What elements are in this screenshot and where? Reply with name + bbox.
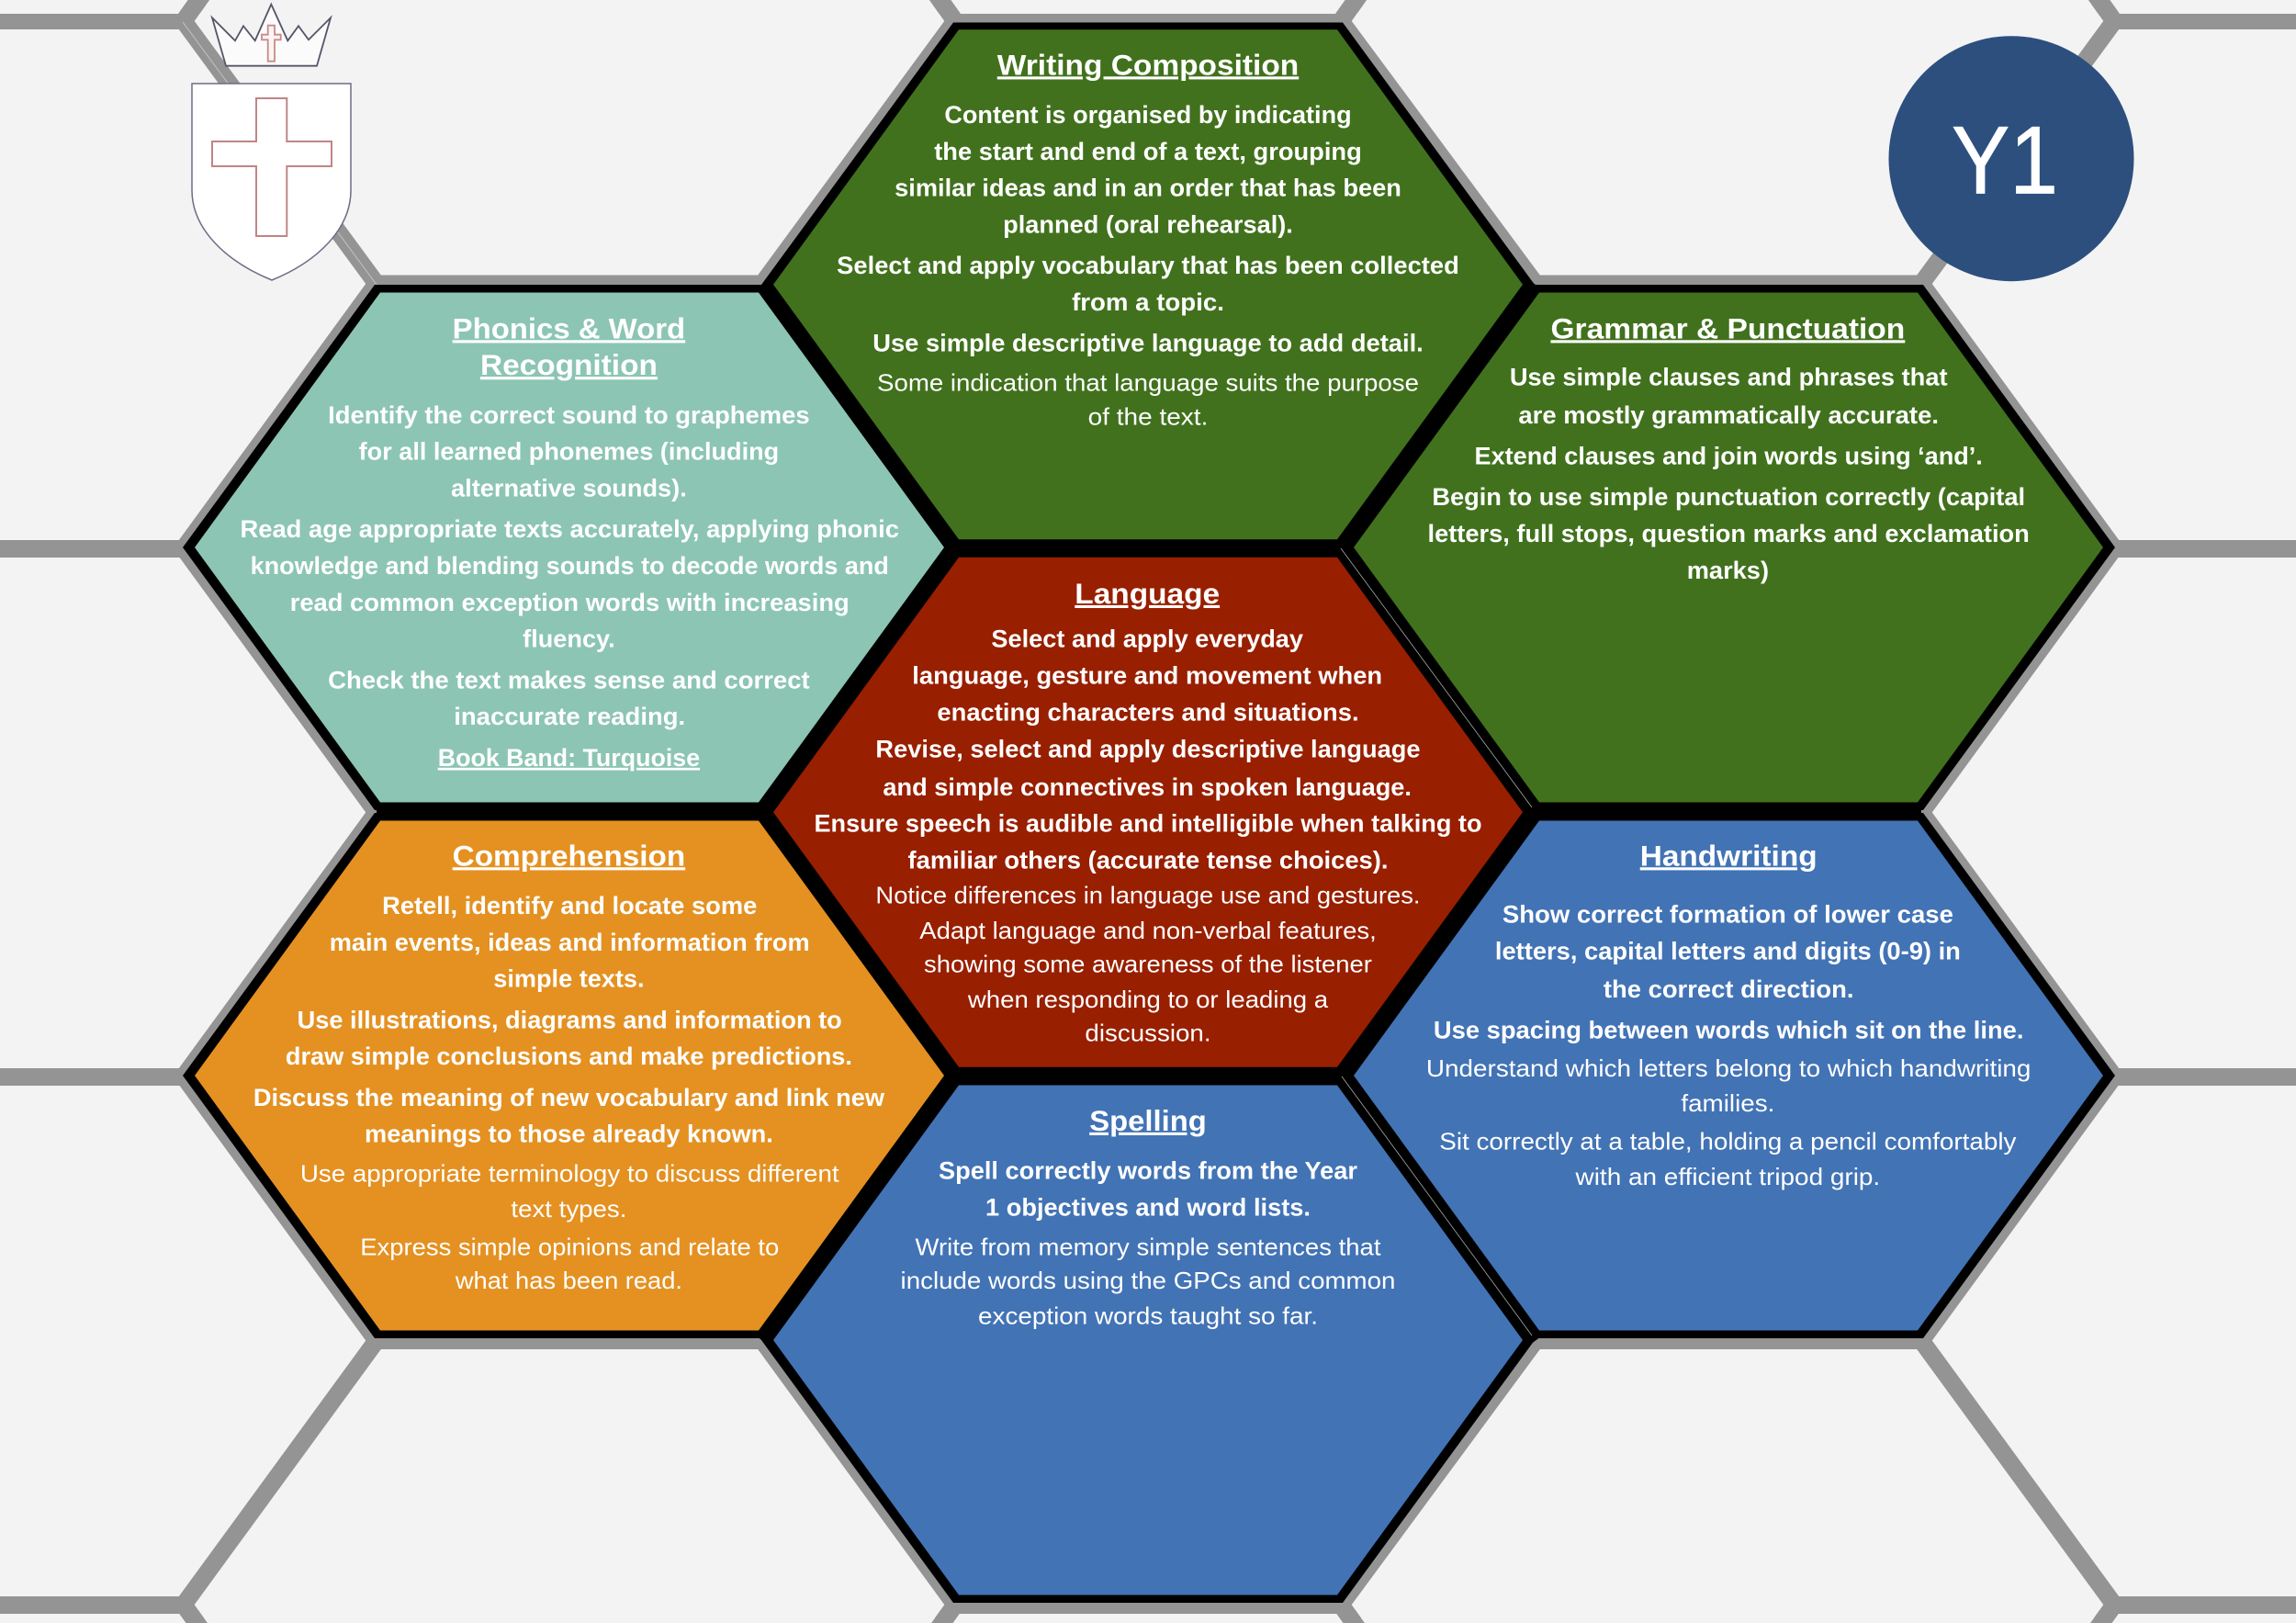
text: Phonics and Word Recognition: knowledge and blending sounds to decode words and <box>251 552 889 580</box>
text: Comprehension: what has been read. <box>455 1268 682 1294</box>
text: Grammar and Punctuation: Begin to use simple punctuation correctly (capital <box>1432 483 2025 511</box>
text: Writing Composition: planned (oral rehearsal). <box>1003 211 1293 239</box>
panel: Handwriting <box>1354 821 2103 1330</box>
panel: Spelling <box>773 1086 1523 1595</box>
panel: Comprehension <box>195 821 944 1330</box>
text: Language: Language <box>1075 578 1220 610</box>
text: Language: enacting characters and situations. <box>937 698 1359 726</box>
text: Language: and simple connectives in spoken language. <box>883 773 1412 801</box>
text: Spelling <box>901 1105 1395 1329</box>
text: Phonics and Word Recognition: read common exception words with increasing <box>290 589 850 616</box>
text: Phonics and Word Recognition: for all learned phonemes (including <box>359 438 779 466</box>
text: Phonics and Word Recognition: Check the text makes sense and correct <box>328 666 810 693</box>
text: Language: Notice differences in language use and gestures. <box>875 884 1421 909</box>
text: Writing Composition: the start and end of a text, grouping <box>934 138 1362 165</box>
text: Handwriting: Handwriting <box>1640 840 1818 872</box>
text: Language: language, gesture and movement when <box>912 662 1382 690</box>
text: Comprehension: Discuss the meaning of new vocabulary and link new <box>253 1084 884 1111</box>
text: Phonics and Word Recognition: Book Band: Turquoise <box>438 744 700 772</box>
text: Language <box>814 578 1482 1047</box>
text: Writing Composition: Some indication that language suits the purpose <box>877 371 1419 397</box>
text: Writing Composition: Writing Composition <box>997 49 1299 81</box>
text: Comprehension: simple texts. <box>493 965 645 993</box>
text: Comprehension: main events, ideas and information from <box>330 929 810 956</box>
text: Handwriting <box>1426 840 2031 1190</box>
text: Comprehension <box>253 840 884 1294</box>
icon: crown <box>212 5 331 66</box>
text: Phonics and Word Recognition: Read age appropriate texts accurately, applying phonic <box>240 515 899 543</box>
panel: Phonics and Word Recognition <box>195 292 944 803</box>
text: Comprehension: meanings to those already known. <box>365 1121 773 1148</box>
text: Comprehension: Express simple opinions and relate to <box>360 1234 779 1260</box>
text: Writing Composition: Use simple descriptive language to add detail. <box>872 330 1424 357</box>
text: Phonics and Word Recognition: Recognition <box>480 349 658 381</box>
text: Writing Composition <box>837 49 1459 430</box>
text: Language: Adapt language and non-verbal features, <box>919 919 1377 944</box>
text: Spelling: Write from memory simple sentences that <box>915 1234 1381 1260</box>
text: Language: when responding to or leading a <box>967 987 1329 1013</box>
text: Comprehension: Retell, identify and locate some <box>382 892 757 919</box>
text: Phonics and Word Recognition: Phonics & Word <box>453 312 685 344</box>
text: Language: showing some awareness of the listener <box>924 952 1372 978</box>
text: Language: discussion. <box>1085 1021 1211 1047</box>
text: Grammar and Punctuation: Use simple clauses and phrases that <box>1510 363 1948 390</box>
text: Writing Composition: Select and apply vocabulary that has been collected <box>837 252 1459 279</box>
text: Grammar and Punctuation: Grammar & Punctuation <box>1550 312 1905 344</box>
text: Grammar and Punctuation: letters, full stops, question marks and exclamation <box>1428 520 2030 547</box>
text: Handwriting: the correct direction. <box>1604 975 1853 1003</box>
panel: Language <box>773 558 1523 1067</box>
text: Comprehension: Use illustrations, diagrams and information to <box>298 1006 842 1033</box>
text: Comprehension: draw simple conclusions and make predictions. <box>286 1043 852 1070</box>
text: Language: Select and apply everyday <box>991 626 1303 653</box>
text: Language: Revise, select and apply descriptive language <box>875 735 1421 762</box>
text: Phonics and Word Recognition: fluency. <box>523 626 615 653</box>
text: Handwriting: families. <box>1681 1091 1774 1117</box>
text: Handwriting: Use spacing between words which sit on the line. <box>1434 1016 2023 1043</box>
text: Handwriting: with an efficient tripod grip. <box>1574 1165 1880 1190</box>
text: Spelling: include words using the GPCs and common <box>901 1268 1395 1294</box>
text: Handwriting: Sit correctly at a table, holding a pencil comfortably <box>1439 1130 2017 1155</box>
text: Comprehension: Use appropriate terminology to discuss different <box>300 1162 839 1188</box>
text: Handwriting: Understand which letters belong to which handwriting <box>1426 1056 2031 1082</box>
text: Spelling: Spelling <box>1089 1105 1207 1137</box>
text: Phonics and Word Recognition <box>240 312 899 772</box>
text: Writing Composition: Content is organised by indicating <box>944 101 1352 129</box>
text: Spelling: exception words taught so far. <box>978 1303 1318 1329</box>
icon: shield with cross <box>192 84 351 280</box>
text: Language: Ensure speech is audible and intelligible when talking to <box>814 810 1482 838</box>
text: Writing Composition: similar ideas and in an order that has been <box>895 175 1401 202</box>
text: Phonics and Word Recognition: alternative sounds). <box>451 474 687 502</box>
text: Grammar and Punctuation: are mostly grammatically accurate. <box>1518 401 1939 429</box>
text: Language: familiar others (accurate tense choices). <box>908 846 1388 873</box>
badge: Y1 circle: Y1 <box>1952 107 2058 215</box>
badge: Y1 circle <box>1888 36 2134 281</box>
panel: Grammar and Punctuation <box>1354 292 2103 803</box>
text: Grammar and Punctuation <box>1428 312 2030 584</box>
text: Phonics and Word Recognition: Identify the correct sound to graphemes <box>328 401 810 429</box>
text: Handwriting: letters, capital letters and digits (0-9) in <box>1495 937 1961 964</box>
text: Phonics and Word Recognition: inaccurate reading. <box>454 703 685 730</box>
text: Grammar and Punctuation: marks) <box>1687 557 1769 584</box>
text: Grammar and Punctuation: Extend clauses and join words using ‘and’. <box>1475 442 1983 469</box>
text: Writing Composition: of the text. <box>1088 404 1208 430</box>
text: Spelling: Spell correctly words from the Year <box>939 1156 1358 1184</box>
text: Spelling: 1 objectives and word lists. <box>985 1193 1311 1221</box>
text: Handwriting: Show correct formation of lower case <box>1503 900 1953 928</box>
text: Comprehension: text types. <box>511 1197 626 1223</box>
text: Comprehension: Comprehension <box>453 840 685 872</box>
panel: Writing Composition <box>773 29 1523 539</box>
text: Writing Composition: from a topic. <box>1072 288 1224 316</box>
